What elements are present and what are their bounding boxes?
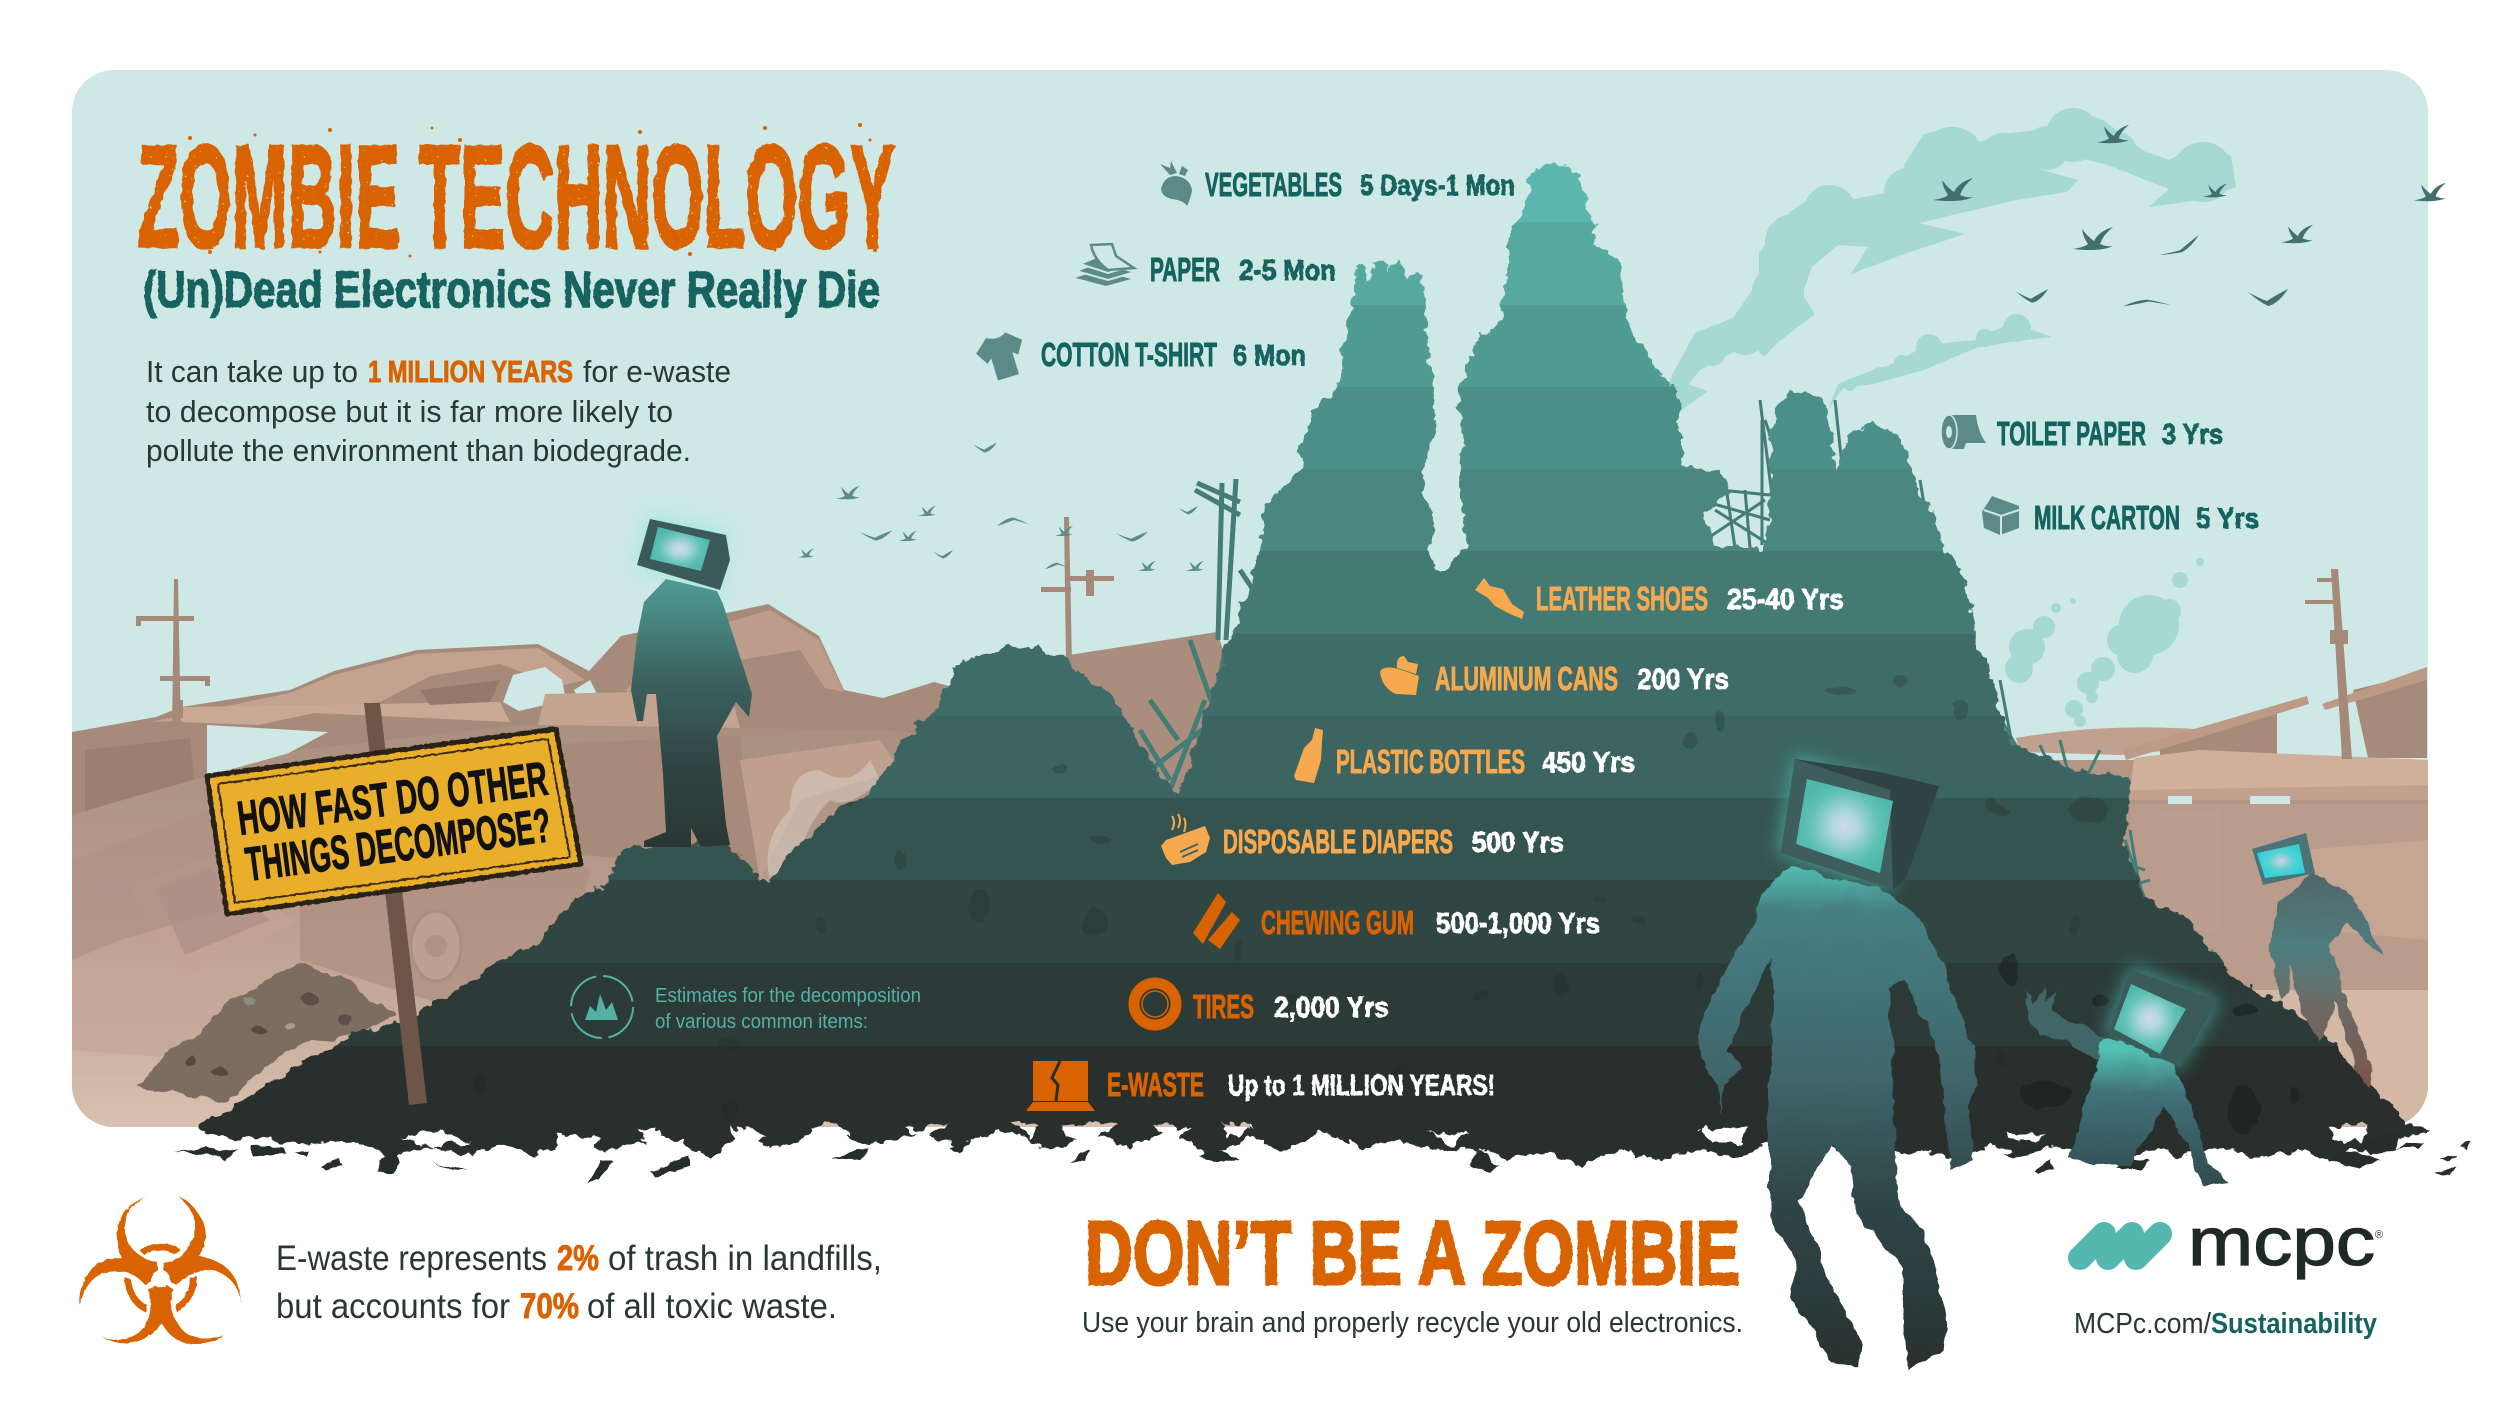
call to action subtext: Use your brain and properly recycle your old electronics.	[1082, 1307, 1743, 1339]
ruins: crashed vehicles left	[72, 735, 900, 1060]
wisp of smoke by hill	[768, 760, 880, 880]
title spatter	[188, 123, 877, 258]
item: tires: TIRES	[1193, 988, 1254, 1025]
large smoke plume	[1662, 108, 2236, 440]
website link: Sustainability	[2211, 1308, 2377, 1340]
item: cotton t-shirt label: 6 Mon	[1233, 340, 1306, 372]
item: cotton t-shirt	[973, 328, 1031, 384]
dark trash clusters	[1998, 953, 2300, 1134]
estimates note with recycle icon	[571, 976, 921, 1038]
item: aluminum cans: ALUMINUM CANS	[1435, 660, 1618, 697]
smoke puffs: lower right	[2005, 558, 2204, 727]
text: ZOMBIE TECHNOLOGY	[138, 115, 895, 278]
birds: upper right flock	[1933, 125, 2446, 306]
item: chewing gum: 500-1,000 Yrs	[1436, 908, 1600, 940]
estimates note with recycle icon: Estimates for the decomposition	[655, 985, 921, 1007]
warning sign: HOW FAST DO OTHER	[235, 753, 551, 846]
warning sign	[207, 729, 581, 914]
item: chewing gum	[1193, 893, 1600, 949]
item: aluminum cans: 200 Yrs	[1637, 664, 1729, 696]
barbed wire and scrap around the towers	[1140, 400, 2150, 900]
e-waste statistic: of trash in landfills,	[608, 1239, 882, 1278]
zombie: crouching foreground	[2025, 965, 2231, 1186]
item: tires	[1134, 983, 1389, 1025]
e-waste statistic: but accounts for	[276, 1287, 510, 1326]
item: plastic bottles: PLASTIC BOTTLES	[1336, 743, 1525, 780]
item: disposable diapers: 500 Yrs	[1472, 827, 1564, 859]
subtitle: (Un)Dead Electronics Never Really Die	[143, 261, 880, 318]
e-waste statistic: of all toxic waste.	[587, 1287, 837, 1326]
item: paper: 2-5 Mon	[1239, 255, 1336, 287]
item: e-waste: E-WASTE	[1107, 1066, 1204, 1103]
e-waste statistic	[276, 1239, 882, 1326]
zombie: large foreground	[1698, 755, 1976, 1371]
utility poles	[136, 517, 2352, 759]
item: leather shoes: 25-40 Yrs	[1727, 584, 1844, 616]
item: disposable diapers: DISPOSABLE DIAPERS	[1223, 823, 1453, 860]
item: e-waste: Up to 1 MILLION YEARS!	[1228, 1070, 1495, 1102]
ruins: wreck between hill and towers	[1072, 632, 1226, 665]
zombie: right background, fading	[2269, 873, 2384, 1087]
item: vegetables: 5 Days-1 Mon	[1360, 170, 1515, 202]
ruins: left wreckage skyline	[72, 604, 1260, 820]
logo: mcpc: mcpc	[2188, 1204, 2375, 1280]
item: toilet paper: TOILET PAPER	[1997, 415, 2146, 452]
call to action heading: DON’T BE A ZOMBIE	[1085, 1204, 1740, 1304]
website link	[2074, 1308, 2377, 1340]
item: cotton t-shirt label: COTTON T-SHIRT	[1041, 336, 1217, 373]
panel: sky and wasteland scene	[72, 70, 2428, 1130]
zombie: standing on hill	[631, 515, 752, 847]
item: chewing gum: CHEWING GUM	[1261, 904, 1414, 941]
item: paper: PAPER	[1150, 251, 1220, 288]
item: milk carton: MILK CARTON	[2034, 499, 2180, 536]
ground: tan dust field	[72, 725, 1250, 1130]
intro paragraph: pollute the environment than biodegrade.	[146, 433, 691, 468]
intro paragraph: It can take up to	[146, 354, 358, 389]
item: vegetables	[1160, 161, 1515, 206]
item: disposable diapers	[1161, 814, 1564, 865]
e-waste statistic: 2%	[557, 1239, 599, 1278]
e-waste statistic: E-waste represents	[276, 1239, 547, 1278]
intro paragraph: 1 MILLION YEARS	[368, 354, 573, 389]
rubble pile	[137, 964, 398, 1103]
intro paragraph: for e-waste	[583, 354, 731, 389]
intro paragraph: to decompose but it is far more likely to	[146, 394, 673, 429]
logo: mcpc: ®	[2375, 1229, 2383, 1241]
item: milk carton: 5 Yrs	[2196, 503, 2259, 535]
item: toilet paper: 3 Yrs	[2162, 419, 2223, 451]
signpost	[364, 703, 427, 1105]
debris flecks along bottom edge	[174, 1130, 2470, 1185]
item: vegetables: VEGETABLES	[1205, 166, 1342, 203]
item: paper	[1072, 244, 1336, 288]
trash speckles	[846, 675, 2108, 870]
decomposition mountain with stepped bands	[170, 140, 2460, 1181]
item: leather shoes: LEATHER SHOES	[1536, 580, 1708, 617]
intro paragraph	[146, 354, 731, 468]
sky	[72, 70, 2428, 1127]
item: plastic bottles	[1294, 728, 1635, 783]
e-waste statistic: 70%	[520, 1287, 579, 1326]
ruins: wreckage right	[2016, 667, 2428, 1130]
website link: MCPc.com/	[2074, 1308, 2212, 1340]
logo: mcpc	[2080, 1204, 2383, 1280]
biohazard icon: ☣	[69, 1156, 251, 1392]
item: e-waste	[1026, 1061, 1495, 1111]
warning sign: THINGS DECOMPOSE?	[243, 799, 554, 892]
birds: middle flock	[798, 442, 1204, 571]
estimates note with recycle icon: of various common items:	[655, 1011, 868, 1033]
item: leather shoes	[1475, 578, 1844, 619]
item: tires: 2,000 Yrs	[1274, 992, 1389, 1024]
item: plastic bottles: 450 Yrs	[1542, 747, 1635, 779]
zombie head: right background TV	[2252, 833, 2315, 885]
